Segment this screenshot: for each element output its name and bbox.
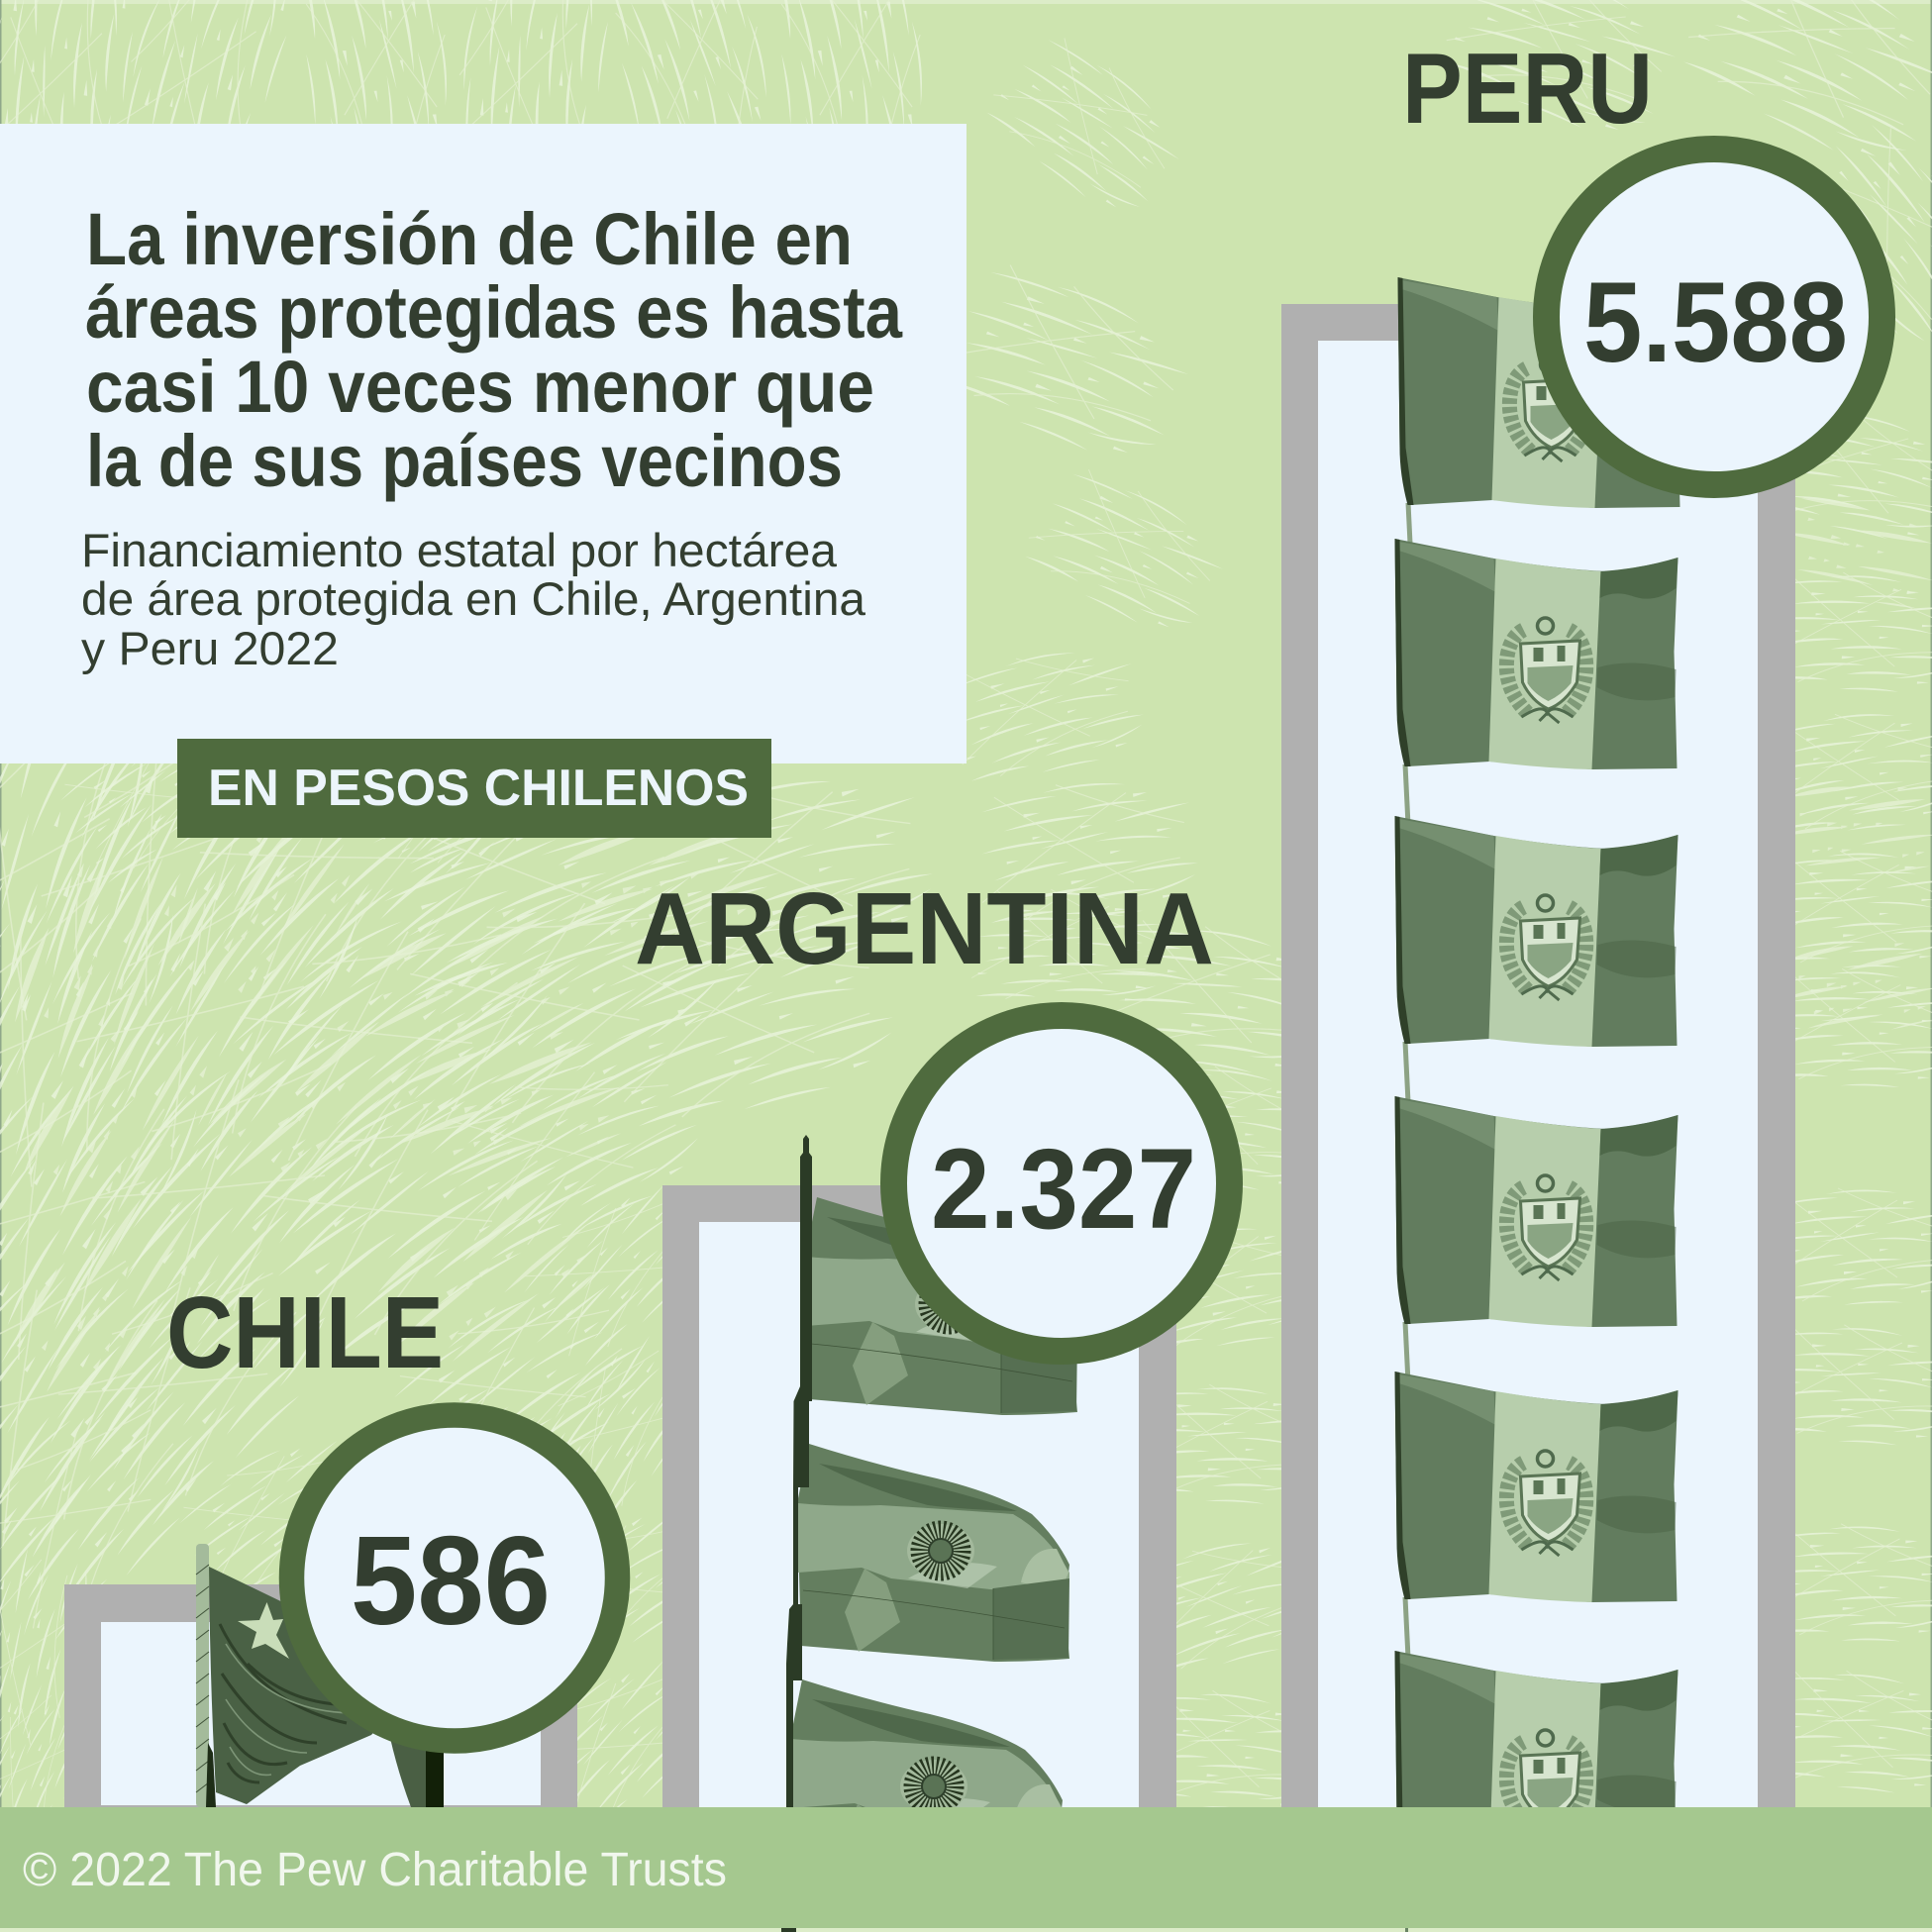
label: Peru: PERU bbox=[1402, 34, 1653, 145]
flags: Peru bbox=[1394, 277, 1681, 1932]
value circle: Chile bbox=[291, 1415, 618, 1741]
label: Argentina: ARGENTINA bbox=[635, 871, 1214, 985]
value circle: Argentina: 2.327 bbox=[931, 1126, 1196, 1253]
copyright text: © 2022 The Pew Charitable Trusts bbox=[23, 1844, 727, 1896]
panel: title box bbox=[0, 124, 966, 763]
subtitle: de área protegida en Chile, Argentina bbox=[81, 573, 866, 626]
bar: Argentina bbox=[662, 1185, 1176, 1807]
value circle: Peru: 5.588 bbox=[1583, 259, 1848, 386]
subtitle bbox=[81, 525, 866, 675]
label: Chile: CHILE bbox=[166, 1275, 444, 1389]
subtitle: y Peru 2022 bbox=[81, 623, 339, 675]
value circle: Argentina bbox=[893, 1016, 1230, 1351]
flag: Chile bbox=[196, 1544, 444, 1807]
bar: Chile bbox=[64, 1584, 577, 1807]
subtitle: Financiamiento estatal por hectárea bbox=[81, 525, 838, 577]
heading: casi 10 veces menor que bbox=[86, 346, 874, 428]
badge: currency: EN PESOS CHILENOS bbox=[208, 760, 749, 817]
value circle: Chile: 586 bbox=[351, 1510, 551, 1651]
footer strip bbox=[0, 1807, 1932, 1932]
flags: Argentina bbox=[786, 1135, 1077, 1897]
bar: Peru bbox=[1281, 304, 1795, 1807]
value circle: Peru bbox=[1547, 149, 1881, 485]
badge: currency bbox=[177, 739, 771, 838]
heading bbox=[85, 198, 903, 502]
heading: la de sus países vecinos bbox=[86, 420, 843, 502]
heading: áreas protegidas es hasta bbox=[85, 271, 903, 354]
heading: La inversión de Chile en bbox=[86, 198, 853, 280]
